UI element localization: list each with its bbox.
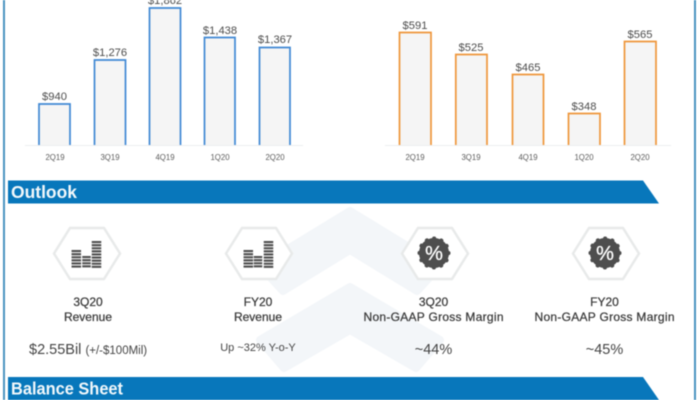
bar chart: right: $591 [403,20,427,32]
bar chart: left [25,0,303,162]
bar chart: right: 2Q20 [630,153,650,162]
outlook item: FY20 margin: ~45% [586,342,623,358]
bar chart: right: 4Q19 [518,153,538,162]
bar chart: left: 2Q20 [265,153,285,162]
outlook item: FY20 revenue: Up ~32% Y-o-Y [220,342,296,354]
outlook item: FY20 margin [534,228,674,358]
section header: Outlook [8,180,659,204]
section header: Outlook: Outlook [11,182,77,202]
outlook item: FY20 margin: Non-GAAP Gross Margin [534,310,674,324]
outlook item: 3Q20 margin [364,228,504,358]
bar chart: right: 1Q20 [574,153,594,162]
section header: Balance Sheet: Balance Sheet [11,378,123,398]
icon: percent badge in hexagon: % [425,243,443,265]
outlook item: 3Q20 margin: ~44% [415,342,452,358]
outlook item: FY20 revenue: Revenue [234,310,282,324]
bar chart: left: 3Q19 [100,153,120,162]
bar chart: left: $1,367 [258,34,292,46]
icon: coin stacks in hexagon [226,228,292,279]
outlook item: 3Q20 margin: 3Q20 [419,295,449,309]
watermark: double chevron [260,211,440,368]
outlook item: 3Q20 revenue: $2.55Bil (+/-$100Mil) [29,342,147,358]
bar chart: right [385,20,671,162]
section header: Balance Sheet [8,377,659,400]
bar chart: left: 2Q19 [45,153,65,162]
bar chart: right: $565 [628,29,652,41]
outlook item: 3Q20 revenue: Revenue [64,310,112,324]
outlook item: 3Q20 margin: Non-GAAP Gross Margin [364,310,504,324]
bar chart: right: $465 [516,62,540,74]
bar chart: right: 2Q19 [405,153,425,162]
icon: coin stacks in hexagon [54,228,120,279]
bar chart: right: $525 [459,42,483,54]
icon: percent badge in hexagon: % [596,243,614,265]
bar chart: left: 1Q20 [210,153,230,162]
bar chart: left: $1,276 [93,47,127,59]
bar chart: right: 3Q19 [461,153,481,162]
outlook item: FY20 revenue: FY20 [244,295,273,309]
bar chart: left: 4Q19 [155,153,175,162]
bar chart: right: $348 [572,101,596,113]
outlook item: FY20 margin: FY20 [590,295,619,309]
outlook item: FY20 revenue [220,228,296,354]
bar chart: left: $1,438 [203,25,237,37]
outlook item: 3Q20 revenue: 3Q20 [73,295,103,309]
outlook item: 3Q20 revenue [29,228,147,358]
bar chart: left: $940 [42,91,67,103]
